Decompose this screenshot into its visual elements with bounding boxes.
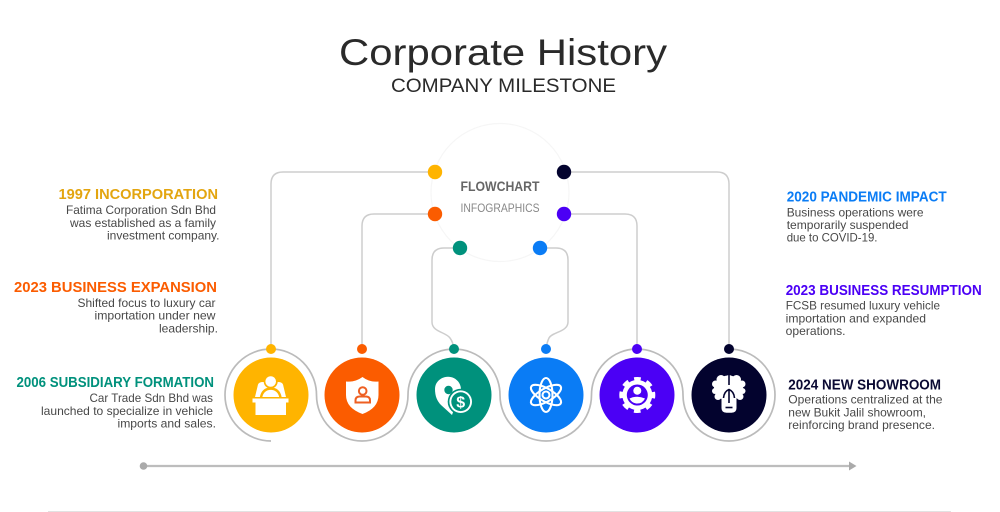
- milestone circle 4 with atom icon: [508, 358, 584, 432]
- left milestone 2023 expansion: importation under new: [94, 309, 216, 323]
- left milestone 2006: Car Trade Sdn Bhd was: [90, 391, 213, 405]
- left milestone 2023 expansion: 2023 BUSINESS EXPANSION: [14, 280, 217, 296]
- connector lines from hub to milestones: [271, 172, 729, 349]
- left milestone 2006: launched to specialize in vehicle: [41, 404, 213, 418]
- subtitle: COMPANY MILESTONE: [391, 75, 616, 97]
- milestone circle 5 with gear and person icon: [600, 358, 674, 432]
- right milestone 2023 resumption: operations.: [786, 324, 846, 338]
- milestone circle 1 with podium icon: [234, 358, 308, 432]
- right milestone 2023 resumption: [786, 283, 982, 338]
- right milestone 2023 resumption: FCSB resumed luxury vehicle: [786, 299, 940, 313]
- central flowchart hub: [431, 124, 569, 262]
- right milestone 2024: 2024 NEW SHOWROOM: [788, 377, 941, 393]
- milestone circle 3 with location and dollar icon: [416, 358, 492, 432]
- right milestone 2020: due to COVID-19.: [787, 231, 878, 245]
- right milestone 2024: Operations centralized at the: [788, 393, 943, 407]
- left milestone 1997: 1997 INCORPORATION: [58, 187, 218, 203]
- timeline arrow: [140, 462, 856, 470]
- left milestone 2023 expansion: leadership.: [159, 322, 218, 336]
- title: Corporate History: [339, 32, 668, 73]
- milestone circle 6 with brain bulb icon: [692, 358, 766, 432]
- milestone circle 2 with shield icon: [324, 358, 400, 432]
- left milestone 1997: investment company.: [107, 228, 220, 242]
- central flowchart hub: INFOGRAPHICS: [460, 201, 540, 215]
- right milestone 2020: temporarily suspended: [787, 218, 908, 232]
- right milestone 2023 resumption: 2023 BUSINESS RESUMPTION: [786, 283, 982, 299]
- milestone top dots: [266, 344, 734, 354]
- right milestone 2020: Business operations were: [787, 205, 924, 219]
- right milestone 2023 resumption: importation and expanded: [786, 312, 926, 326]
- right milestone 2020: 2020 PANDEMIC IMPACT: [787, 190, 947, 206]
- left milestone 2006: 2006 SUBSIDIARY FORMATION: [16, 375, 214, 391]
- right milestone 2024: reinforcing brand presence.: [788, 418, 935, 432]
- right milestone 2024: new Bukit Jalil showroom,: [788, 405, 926, 419]
- left milestone 1997: Fatima Corporation Sdn Bhd: [66, 203, 216, 217]
- central flowchart hub: FLOWCHART: [460, 178, 540, 194]
- wavy ring around milestone circles: [225, 349, 775, 441]
- right milestone 2024: [788, 377, 943, 432]
- left milestone 2023 expansion: [14, 280, 218, 336]
- left milestone 2006: [16, 375, 216, 430]
- left milestone 1997: was established as a family: [69, 216, 216, 230]
- milestone circle 3 with location and dollar icon: $: [456, 394, 465, 412]
- hub connector dots: [428, 165, 571, 255]
- left milestone 2023 expansion: Shifted focus to luxury car: [78, 296, 216, 310]
- right milestone 2020: [787, 190, 947, 245]
- left milestone 2006: imports and sales.: [118, 416, 216, 430]
- left milestone 1997: [58, 187, 220, 242]
